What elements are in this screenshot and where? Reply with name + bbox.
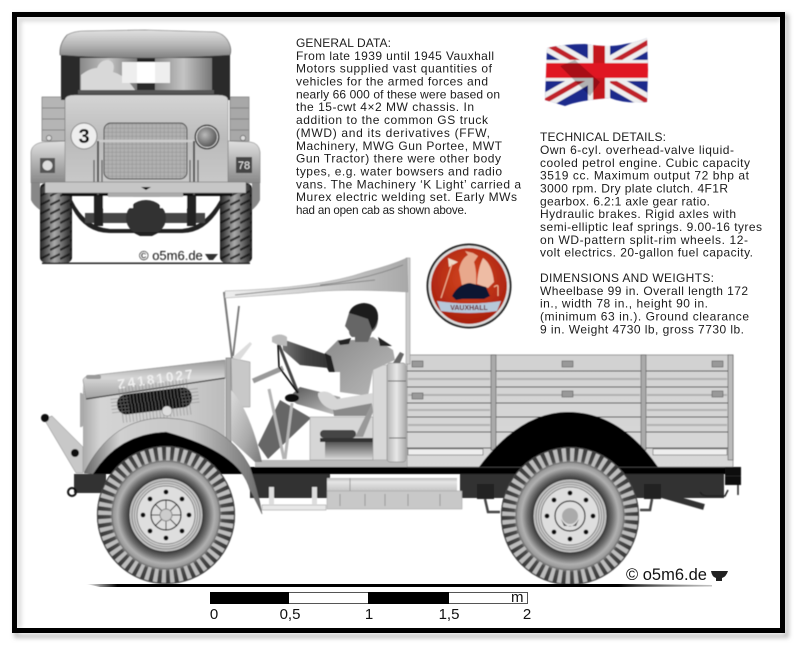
metric scale bar: 2 (523, 606, 531, 623)
technical details text: Own 6-cyl. overhead-valve liquid- (540, 143, 734, 157)
jerrycan cylinder (387, 352, 406, 462)
seat (310, 365, 388, 460)
icon: helmet (711, 571, 728, 581)
cowl and firewall (226, 342, 262, 467)
driver upper body (272, 334, 395, 410)
technical details text: semi-elliptic leaf springs. 9.00-16 tyres (540, 220, 762, 234)
general data text: Machinery, MWG Gun Portee, MWT (296, 139, 503, 153)
technical details text: Hydraulic brakes. Rigid axles with (540, 207, 736, 221)
dimensions and weights text: (minimum 63 in.). Ground clearance (540, 310, 749, 324)
technical details text: gearbox. 6.2:1 axle gear ratio. (540, 194, 710, 208)
steering column and wheel (253, 340, 299, 402)
metric scale bar: 1 (365, 606, 373, 623)
front view of truck (31, 30, 260, 264)
bonnet (80, 360, 225, 472)
windscreen surround (61, 50, 230, 100)
side lamps (46, 135, 246, 141)
dimensions and weights text: DIMENSIONS AND WEIGHTS: (540, 271, 714, 285)
forearm (282, 339, 328, 368)
copyright front view: © o5m6.de (139, 248, 203, 263)
general data text: vans. The Machinery ‘K Light’ carried a (296, 177, 521, 191)
windscreen glass with driver (78, 58, 214, 94)
general data text: addition to the common GS truck (296, 113, 489, 127)
icon: griffin badge (426, 244, 512, 328)
general data text: Gun Tractor) there were other body (296, 152, 501, 166)
driver head (345, 303, 378, 342)
tactical number 3 (71, 123, 97, 149)
general data text: (MWD) and its derivatives (FFW, (296, 126, 490, 140)
soft-top canopy (60, 30, 231, 58)
front wings (31, 141, 260, 210)
copyright side view: © o5m6.de (626, 566, 707, 584)
headlamp (194, 124, 220, 150)
general data text: had an open cab as shown above. (296, 204, 467, 217)
metric scale bar: 1,5 (439, 606, 459, 623)
cargo bed (407, 355, 733, 467)
technical details text: cooled petrol engine. Cubic capacity (540, 156, 750, 170)
bonnet louvres (116, 386, 193, 415)
technical details text: on WD-pattern split-rim wheels. 12- (540, 233, 748, 247)
sleeve cuff (323, 353, 335, 372)
radiator grille (104, 123, 187, 179)
front wheel well and wing (84, 406, 262, 514)
general data text: From late 1939 until 1945 Vauxhall (296, 49, 494, 63)
metric scale bar: 0,5 (280, 606, 300, 623)
chassis frame (68, 467, 725, 498)
bonnet and body (65, 95, 228, 183)
metric scale bar: m (511, 589, 524, 606)
epaulettes (338, 337, 392, 346)
front wheel (97, 446, 235, 584)
fuel tank and step (262, 478, 462, 510)
technical details text: TECHNICAL DETAILS: (540, 130, 666, 144)
brush guard (94, 141, 198, 195)
registration number: Z4181027 (116, 367, 194, 392)
technical details text: 3519 cc. Maximum output 72 bhp at (540, 169, 750, 183)
rear wheel (501, 447, 639, 585)
general data text: nearly 66 000 of these were based on (296, 87, 500, 101)
lower arm (318, 391, 373, 410)
canopy pillar (406, 258, 410, 364)
rear suspension and exhaust (477, 484, 704, 512)
driver legs (258, 387, 372, 459)
dimensions and weights text: Wheelbase 99 in. Overall length 172 (540, 284, 748, 298)
general data text (296, 36, 521, 217)
rear hitch (700, 467, 741, 496)
unit sign 78: 78 (238, 160, 250, 172)
dimensions and weights text: in., width 78 in., height 90 in. (540, 297, 708, 311)
general data text: the 15-cwt 4×2 MW chassis. In (296, 100, 474, 114)
dimensions and weights text: 9 in. Weight 4730 lb, gross 7730 lb. (540, 322, 744, 336)
rear bed seen behind cab (42, 97, 249, 141)
side view of truck (41, 258, 741, 585)
general data text: Motors supplied vast quantities of (296, 62, 493, 76)
front tyres (40, 183, 252, 263)
bumper (45, 182, 246, 197)
metric scale bar (210, 589, 531, 623)
gear levers (269, 389, 292, 459)
technical details text: volt electrics. 20-gallon fuel capacity. (540, 246, 753, 260)
griffin emblem (441, 251, 498, 300)
hand (272, 334, 287, 346)
canopy roof (225, 258, 408, 298)
tactical number 3: 3 (78, 126, 90, 148)
ground line (42, 262, 250, 264)
rear wheel arch (479, 412, 658, 467)
badge name banner: VAUXHALL (450, 305, 489, 312)
cab floor (255, 460, 407, 467)
general data text: types, e.g. water bowsers and radio (296, 164, 502, 178)
technical details text: 3000 rpm. Dry plate clutch. 4F1R (540, 182, 728, 196)
dimensions and weights text (540, 271, 749, 336)
metric scale bar: 0 (210, 606, 218, 623)
shirt (325, 337, 395, 396)
front axle and suspension (62, 190, 232, 236)
general data text: GENERAL DATA: (296, 36, 391, 50)
towing hook front (41, 414, 83, 473)
icon: union jack flag (540, 35, 652, 107)
formation sign left wing (40, 158, 55, 173)
unit sign 78 (236, 157, 252, 173)
folded windscreen and rods (224, 292, 239, 358)
general data text: vehicles for the armed forces and (296, 75, 488, 89)
ground line (86, 584, 712, 587)
general data text: Murex electric welding set. Early MWs (296, 190, 517, 204)
technical details text (540, 130, 762, 260)
